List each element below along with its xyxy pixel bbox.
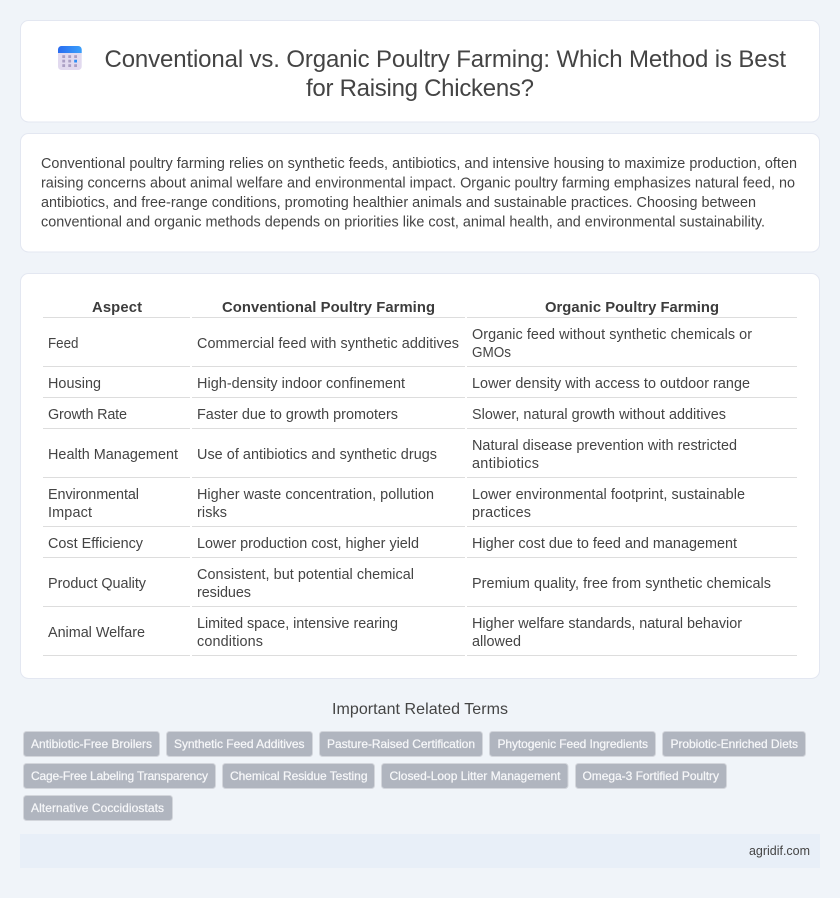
panel: introduction [20,134,820,252]
tag: Omega-3 Fortified Poultry: Omega-3 Fortified Poultry [582,769,719,783]
tag: Chemical Residue Testing: Chemical Residue Testing [230,769,368,783]
tag: Cage-Free Labeling Transparency [24,764,216,788]
row: housing: High-density indoor confinement [197,376,405,392]
row: growth rate: Faster due to growth promoters [197,407,398,423]
row: growth rate: Slower, natural growth without additives [472,407,726,423]
text block: introduction: Conventional poultry farming relies on synthetic feeds, antibiotics, and intensive housing to maximize production, often [41,156,797,172]
title: for Raising Chickens? [306,75,534,102]
row: housing: Housing [48,376,101,392]
text block: introduction: conventional and organic methods depends on priorities like cost, animal health, and environmental sustainability. [41,214,765,230]
title [104,46,786,102]
panel: header [20,20,820,122]
tag: Synthetic Feed Additives [166,732,312,756]
tag: Closed-Loop Litter Management: Closed-Loop Litter Management [390,769,561,783]
row: environmental impact: Lower environmental footprint, sustainable [472,487,745,503]
footer: agridif.com [749,843,810,858]
row: animal welfare: Higher welfare standards, natural behavior [472,616,742,632]
row: cost efficiency [48,536,737,552]
row: health management: Use of antibiotics and synthetic drugs [197,447,437,463]
row: growth rate [48,407,726,423]
tag: Antibiotic-Free Broilers [24,732,160,756]
row: feed [48,327,752,361]
panel: related term tags [24,732,806,820]
tag: Antibiotic-Free Broilers: Antibiotic-Free Broilers [31,737,152,751]
tag: Alternative Coccidiostats: Alternative Coccidiostats [31,801,164,815]
row: environmental impact: risks [197,505,227,521]
row: environmental impact: practices [472,505,531,521]
tag: Probiotic-Enriched Diets: Probiotic-Enriched Diets [670,737,798,751]
row: health management [48,438,737,472]
row: animal welfare: Limited space, intensive rearing [197,616,398,632]
row: health management: Natural disease prevention with restricted [472,438,737,454]
row: feed: Commercial feed with synthetic additives [197,336,459,352]
text block: introduction [41,156,797,230]
tag: Cage-Free Labeling Transparency: Cage-Free Labeling Transparency [31,769,208,783]
row: health management: Health Management [48,447,178,463]
table header: Conventional Poultry Farming [222,300,435,316]
tag: Alternative Coccidiostats [24,796,172,820]
icon: calendar [58,46,82,70]
row: cost efficiency: Cost Efficiency [48,536,144,552]
title: Conventional vs. Organic Poultry Farming: Which Method is Best [104,46,786,73]
row: animal welfare: conditions [197,634,263,650]
row: cost efficiency: Lower production cost, higher yield [197,536,419,552]
row: feed: Feed [48,336,78,352]
row: animal welfare: allowed [472,634,521,650]
row: environmental impact: Environmental [48,487,139,503]
tag: Chemical Residue Testing [222,764,374,788]
tag: Phytogenic Feed Ingredients: Phytogenic Feed Ingredients [498,737,648,751]
row: animal welfare [48,616,742,650]
table header: Organic Poultry Farming [545,300,719,316]
row: product quality [48,567,771,601]
row: product quality: Product Quality [48,576,147,592]
text block: introduction: antibiotics, and free-range conditions, promoting healthier animals and sustainable practices. Choosing between [41,195,756,211]
panel: comparison table [20,274,820,678]
tag: Phytogenic Feed Ingredients [490,732,656,756]
tag: Closed-Loop Litter Management [382,764,568,788]
text block: introduction: raising concerns about animal welfare and environmental impact. Organic poultry farming emphasizes natural feed, no [41,176,795,192]
row: feed: Organic feed without synthetic chemicals or [472,327,752,343]
row: feed: GMOs [472,345,511,361]
row: environmental impact: Impact [48,505,92,521]
row: environmental impact: Higher waste concentration, pollution [197,487,434,503]
row: product quality: residues [197,585,251,601]
row: housing [48,376,750,392]
row: cost efficiency: Higher cost due to feed and management [472,536,737,552]
row: health management: antibiotics [472,456,539,472]
heading: important related terms: Important Related Terms [332,701,508,718]
row: product quality: Consistent, but potential chemical [197,567,414,583]
row: environmental impact [48,487,745,521]
tag: Pasture-Raised Certification [320,732,482,756]
table header [92,300,719,316]
tag: Omega-3 Fortified Poultry [576,764,726,788]
row: housing: Lower density with access to outdoor range [472,376,750,392]
row: growth rate: Growth Rate [48,407,127,423]
table header: Aspect [92,300,142,316]
row: animal welfare: Animal Welfare [48,625,145,641]
footer [20,834,820,868]
tag: Probiotic-Enriched Diets [662,732,806,756]
row: product quality: Premium quality, free from synthetic chemicals [472,576,771,592]
tag: Pasture-Raised Certification: Pasture-Raised Certification [327,737,475,751]
tag: Synthetic Feed Additives: Synthetic Feed Additives [174,737,304,751]
